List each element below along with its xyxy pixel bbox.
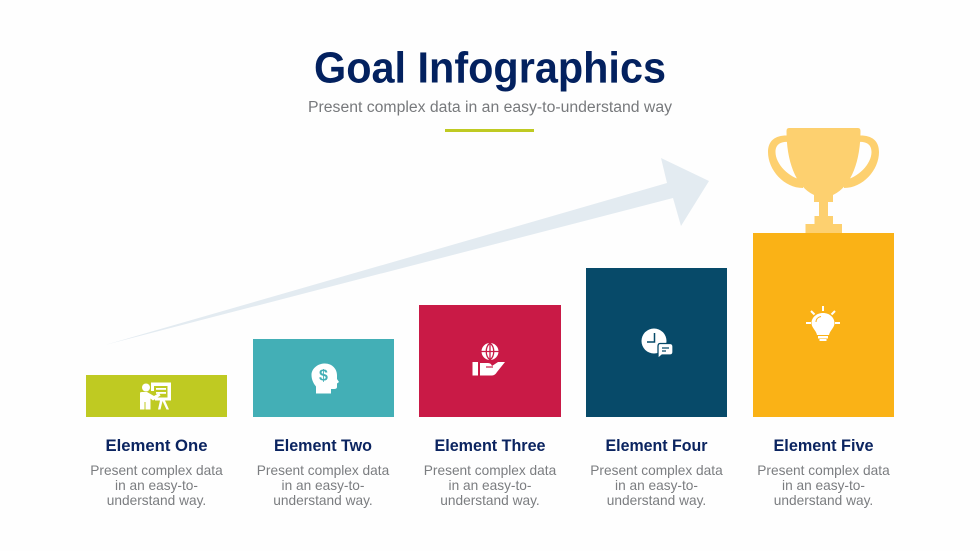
subtitle: Present complex data in an easy-to-understand way: [308, 99, 672, 116]
text: element three: [424, 437, 557, 508]
text: element four: Present complex data: [590, 463, 723, 478]
icon: clock and chat bubble: [642, 328, 673, 358]
bar: element two: [253, 339, 394, 417]
text: element three: in an easy-to-: [449, 478, 531, 493]
text: element three: Present complex data: [424, 463, 557, 478]
text: element two: Present complex data: [257, 463, 390, 478]
text: element one: [90, 437, 223, 508]
title underline: [445, 129, 534, 132]
text: element five: [757, 437, 890, 508]
text: element five: understand way.: [774, 493, 873, 508]
text: element five: in an easy-to-: [782, 478, 865, 493]
bar: element four: [586, 268, 727, 417]
text: element five: Element Five: [774, 437, 874, 455]
bar: element five: [753, 233, 894, 417]
text: element four: Element Four: [606, 437, 708, 455]
title: Goal Infographics: [314, 44, 666, 92]
text: element four: in an easy-to-: [615, 478, 698, 493]
text: element four: [590, 437, 723, 508]
text: element two: in an easy-to-: [282, 478, 364, 493]
text: element three: understand way.: [440, 493, 540, 508]
text: element two: understand way.: [273, 493, 373, 508]
trophy: [768, 128, 879, 233]
text: element two: Element Two: [274, 437, 372, 455]
icon: light bulb: [806, 306, 840, 341]
icon: presenter at board: [140, 382, 171, 410]
text: element one: in an easy-to-: [115, 478, 198, 493]
icon: head with dollar: $: [319, 368, 328, 384]
text: element two: [257, 437, 390, 508]
bar: element three: [419, 305, 561, 417]
text: element one: Element One: [106, 437, 208, 455]
icon: hand holding globe: [472, 343, 505, 376]
text: element one: understand way.: [107, 493, 206, 508]
text: element five: Present complex data: [757, 463, 890, 478]
icon: head with dollar: [312, 363, 339, 394]
bar: element one: [86, 375, 227, 417]
text: element one: Present complex data: [90, 463, 223, 478]
text: element four: understand way.: [607, 493, 706, 508]
growth arrow: [105, 158, 709, 345]
text: element three: Element Three: [434, 437, 546, 455]
